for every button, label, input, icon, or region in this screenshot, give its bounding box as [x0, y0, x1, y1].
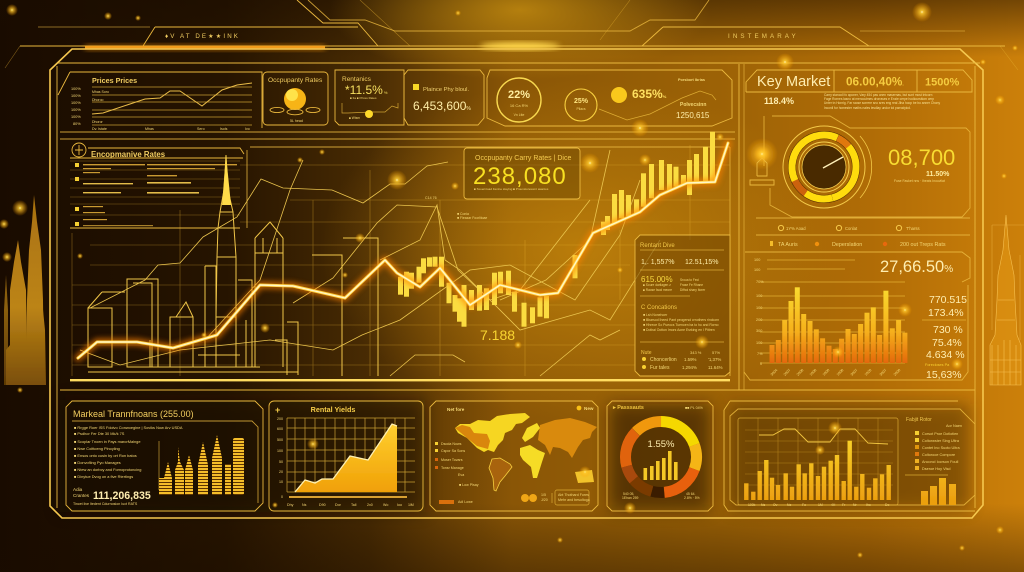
map legend: Dsoda Nows	[441, 442, 462, 446]
description text: Inconll for homester maths nales lesdlay undor tol parrodyicd.	[824, 106, 911, 110]
small chart labels: ■ Fleazar Foorlitoae	[457, 216, 487, 220]
value: 7.188: 7.188	[480, 327, 515, 343]
list: ■ Nwe Coittoeng Plnoyling	[74, 446, 120, 451]
panel: market transformations	[66, 401, 263, 511]
card value: 238,080	[473, 163, 567, 190]
donut value: 1.55%	[648, 439, 675, 450]
heading: rental yields: Rental Yields	[311, 405, 355, 414]
right stats: 4.634 %	[926, 349, 965, 361]
chart grid and axes: D90	[319, 503, 326, 507]
concations list: ■ Dothai Ootton Imors Aone Esrking en I Pittren	[643, 328, 715, 332]
x axis labels: 2000	[893, 368, 901, 377]
gauge dial	[779, 122, 872, 212]
legend: Dseroe Hoy Vlsd	[922, 467, 950, 471]
label: polvecsinn: Polvecsinn	[680, 102, 706, 108]
panel: prices	[58, 72, 262, 131]
skyline right	[990, 215, 1024, 385]
metric: 118.4%: 118.4%	[764, 96, 794, 106]
sparkline	[342, 96, 398, 120]
area chart	[295, 424, 397, 492]
overlay line	[759, 429, 888, 444]
donut chart	[611, 407, 711, 507]
x axis labels: 3007	[879, 368, 887, 377]
heading: key market: Key Market	[757, 74, 830, 90]
panel: main chart	[72, 132, 730, 376]
list: ■ Donvofling Pyo Manages	[74, 460, 121, 465]
summary table: Fur tales	[650, 365, 670, 371]
map legend: Eva	[458, 473, 464, 477]
legend rows: Conlat	[845, 226, 858, 231]
map continents	[455, 413, 597, 491]
values row: 1,. 1,557%	[641, 259, 674, 266]
chart frame and grid: 100k	[748, 503, 756, 507]
x axis labels: 1008	[836, 368, 844, 377]
ring: 25%	[565, 89, 597, 121]
icon: golden coin	[611, 87, 627, 103]
chart bars	[744, 441, 891, 500]
map legend: Moser Tovars	[441, 458, 463, 462]
ring: 22%	[497, 78, 541, 122]
label: polvecsinn	[676, 78, 710, 120]
heading: encompanive: Encopmanive Rates	[91, 150, 166, 159]
chart frame and grid	[738, 418, 898, 507]
small chart labels: C14 76	[425, 196, 437, 200]
metric: 635%: 635%%	[632, 87, 667, 101]
heading: concations: C Concations	[641, 305, 677, 311]
label: new	[577, 406, 594, 411]
list	[72, 421, 258, 503]
outer frame	[50, 49, 983, 518]
x axis labels: 1008	[809, 368, 817, 377]
bars	[770, 287, 907, 363]
small chart labels	[425, 196, 487, 220]
right stats: 770.515	[929, 294, 967, 306]
gridlines and axis labels: 100%	[71, 115, 81, 119]
totals: Tincet live ltedent Cdurnosion Iuct RATS	[73, 502, 138, 506]
metric: 06.00,40%: 06.00,40%.	[846, 74, 904, 88]
chart gridlines and axis: 200	[756, 318, 762, 322]
chart frame and grid: Iho	[866, 503, 871, 507]
card: occupancy carry rates	[464, 148, 580, 199]
x axis labels: 3004	[770, 368, 778, 377]
mini bars	[905, 475, 956, 505]
sparkline: ■ Wtsm	[349, 116, 360, 120]
summary table: '1,37%	[708, 357, 721, 362]
heading: fabjit rotor: Fabjit Rotor	[906, 417, 932, 423]
list: ■ Dinytue Dvog on a five Rtertings	[74, 474, 133, 479]
concations list: ■ Bbarsod Iheed Pant peogersd crnothers rinckorn	[643, 318, 719, 322]
values row	[640, 250, 724, 342]
chart gridlines and axis: 7%	[757, 352, 763, 356]
chart grid and axes: Ioo	[397, 503, 402, 507]
metric: 27,66.50%: 27,66.50%	[880, 258, 953, 276]
panel: occupancy rates	[263, 72, 328, 125]
summary table: 1.59%	[684, 357, 697, 362]
summary table: 57%	[712, 350, 720, 355]
panel: encompanive rates	[70, 143, 244, 228]
heading: occupancy: Occpupanty Rates	[268, 77, 323, 84]
sparkline: ■ Ita ■ Prices Rates	[350, 96, 377, 100]
right stats: 173.4%	[928, 307, 964, 319]
metric: 1500%: 1500%	[925, 76, 959, 88]
chart gridlines and axis: 100	[756, 294, 762, 298]
panel: world map	[430, 401, 598, 511]
candlestick bars	[398, 132, 715, 327]
list: ■ Ntew an dorbcy and Fornoprotoncing	[74, 467, 141, 472]
right stats: 730 %	[933, 324, 963, 336]
header decoration and labels	[5, 0, 1018, 70]
summary table: 1,294%	[682, 365, 697, 370]
icon: plus: +	[275, 405, 280, 415]
heading: prices: Prices Prices	[92, 76, 137, 85]
list: ■ Rrgge Roer ISS Fdoivo Conwoegine | Soviks Now Arv USDA	[74, 425, 183, 430]
chart grid and axes: Tall	[351, 503, 357, 507]
gridlines and axis labels: Ivo	[245, 127, 250, 131]
gridlines and axis labels: 100%	[71, 101, 81, 105]
panel: bar chart	[744, 252, 970, 381]
label: net fore: Net fore	[447, 407, 465, 412]
map legend	[435, 442, 479, 504]
metric: 08,700: 08,700	[888, 145, 955, 170]
chart gridlines and axis: 300	[756, 329, 762, 333]
legend rows: Deperslation	[832, 242, 862, 248]
chart grid and axes: Dhy	[287, 503, 294, 507]
panel: key market header	[746, 70, 972, 110]
x axis labels: 2007	[783, 368, 791, 377]
chart frame and grid: Ns	[761, 503, 765, 507]
chart grid and axes: 100	[277, 449, 283, 453]
chart grid and axes: 500	[277, 438, 283, 442]
main glowing trend line	[78, 143, 728, 358]
totals: Adia	[73, 487, 83, 492]
gridlines and axis labels: 100%	[71, 108, 81, 112]
secondary trend lines	[80, 150, 660, 376]
list: ■ Ensos onto cusin by ort Ron batos	[74, 453, 137, 458]
panel: rate circles	[487, 70, 732, 126]
ring: 25%: 25%	[574, 98, 589, 105]
description text: Fage Rornes lasno at mercoutmes drorrases e Enzie cerpe hodioursttom cerp	[824, 97, 934, 101]
legend: Aor Naen	[946, 424, 962, 428]
map stats: Mehr and besoltoga	[558, 498, 590, 502]
chart grid and axes: 50	[279, 460, 283, 464]
panel: rentanics	[335, 70, 404, 125]
chart grid and axes: 0	[281, 495, 283, 499]
legend rows: 200 out Treps Rats	[900, 242, 946, 248]
map legend: ■ Low Plsay	[459, 483, 479, 487]
description text: Carry stancoll fo aponer, Vary 454 pas onen masernas, but sunt most Intcorn	[824, 93, 933, 97]
right stats	[922, 294, 967, 381]
panel: gauge	[746, 116, 970, 217]
gridlines and axis labels: Sero	[197, 127, 205, 131]
map legend: Adi Lowe	[458, 500, 473, 504]
totals	[73, 487, 151, 506]
chart gridlines and axis: 100	[754, 268, 760, 272]
icon: badge	[72, 143, 86, 157]
x axis labels: 1028	[864, 368, 872, 377]
panel: rentant dive	[635, 235, 730, 376]
ring: 22%: 16 Ca R%	[510, 103, 529, 108]
chart frame and grid: Fo	[802, 503, 806, 507]
ring: 25%: Pliacs	[576, 107, 586, 111]
legend: Contet Ino Suoto Ultra	[922, 446, 960, 450]
donut captions: 1Ehan 259	[622, 496, 639, 500]
chart grid and axes: 2x0	[367, 503, 373, 507]
chart grid	[72, 145, 730, 376]
totals: Crantes	[73, 493, 90, 498]
right header label: INSTEMARAY	[728, 33, 799, 40]
gridlines and axis labels: Dv. Istate	[92, 127, 107, 131]
chart frame and grid: Do	[885, 503, 889, 507]
totals: 111,206,835	[93, 490, 151, 502]
icon: square marker	[413, 84, 419, 90]
values row: Difhoi shary Itorer	[680, 288, 706, 292]
legend: Corsot Proe Dotlotien	[922, 432, 958, 436]
x axis labels	[770, 368, 901, 377]
map stats	[521, 490, 590, 505]
summary table	[641, 350, 723, 371]
ring: 22%: Vn Ltte	[514, 113, 524, 117]
chart gridlines and axis: 100	[756, 341, 762, 345]
chart gridlines and axis: 100	[754, 258, 760, 262]
map stats: Abt Thothard Fores	[558, 493, 589, 497]
concations list: ■ Hhreoe So Pueocs Tuenoen ba to ho and Rorno	[643, 323, 719, 327]
gridlines and axis labels: Dhoroo	[92, 98, 104, 102]
donut captions: 2.8% · 5%	[684, 496, 700, 500]
chart grid and axes: 200	[277, 417, 283, 421]
summary table: Nute	[641, 350, 652, 356]
chart gridlines and axis	[754, 258, 905, 366]
chart grid and axes: Ns	[302, 503, 307, 507]
legend: Anconcl Iocrson Foull	[922, 460, 958, 464]
gridlines and axis labels: Dhoror	[92, 120, 104, 124]
values row: Sroua to Feci	[680, 278, 699, 282]
values row: 12.51,15%	[685, 259, 718, 266]
city illustration	[159, 435, 244, 495]
concations list: ■ Lsh Nonehoer	[643, 313, 668, 317]
chart frame and grid: Fr	[842, 503, 846, 507]
label: polvecsinn: Porsbort Ibrias	[678, 78, 705, 82]
gridlines and axis labels: Mhas	[145, 127, 154, 131]
chart gridlines and axis: 70%	[756, 280, 764, 284]
chart gridlines and axis: 100	[756, 306, 762, 310]
metric: 11.50%: 11.50%	[926, 171, 950, 178]
gridlines and axis labels: 100%	[71, 94, 81, 98]
chart frame and grid: Ne	[787, 503, 791, 507]
gauge caption: Fuse Fasket nns · Iheats Inouvilat	[894, 179, 945, 183]
map stats: 1/5	[541, 493, 546, 497]
right stats: 15,63%	[926, 369, 962, 381]
map legend: Tonsr Manage	[441, 466, 464, 470]
list: ■ Psdhor Fer Dte 30 Mk/k 7S	[74, 431, 125, 436]
small chart labels: ■ Conia	[457, 212, 469, 216]
chart grid and axes: 1lM	[408, 503, 414, 507]
gridlines and axis labels: 80%	[73, 122, 81, 126]
legend: Coltorooe Compore	[922, 453, 955, 457]
donut captions	[622, 492, 700, 500]
chart grid and axes: 20	[279, 470, 283, 474]
text rows	[70, 161, 240, 226]
donut captions: 540 05,	[623, 492, 634, 496]
legend rows: 1Y% Aoad	[786, 226, 806, 231]
panel: rental yields	[269, 401, 423, 511]
legend rows: T'harss	[906, 226, 920, 231]
legend	[915, 424, 962, 471]
summary table: Choncerlion	[650, 357, 677, 363]
donut captions: 45 64.	[686, 492, 695, 496]
x axis labels: 2008	[796, 368, 804, 377]
chart grid and axes: Wo	[383, 503, 388, 507]
skyline wireframe	[88, 155, 378, 376]
summary table: 11.64%	[708, 365, 723, 370]
summary table: 343 %	[690, 350, 702, 355]
icon: beacon	[746, 138, 778, 185]
card heading: Occpupanty Carry Rates | Dice	[475, 155, 571, 162]
metric: plaince: 6,453,600%	[413, 99, 471, 113]
trend line	[599, 91, 716, 120]
x axis labels: 3007	[850, 368, 858, 377]
map legend: Cspor Sa Sons	[441, 449, 465, 453]
label: plaince: Plaince Phy bloul.	[423, 87, 469, 93]
panel: fabjit rotor	[724, 401, 975, 511]
map stats: J/20	[541, 498, 548, 502]
chart gridlines and axis: 0	[760, 362, 762, 366]
chart grid and axes: Dor	[335, 503, 342, 507]
chart grid and axes: 600	[277, 427, 283, 431]
description text: Unter tn Honrig. Far raose sorrere sno sres eng real Jiha hoop be bo anner Chony	[824, 101, 940, 105]
chart frame and grid: Ov	[773, 503, 778, 507]
x axis labels: 1000	[822, 368, 830, 377]
metric: rentanics: *11.5% %	[345, 83, 388, 97]
chart frame and grid: Nr	[853, 503, 857, 507]
chart frame and grid: 1M	[818, 503, 823, 507]
label: polvecsinn: 1250,615	[676, 111, 710, 120]
values row: ■ Raose faod meore	[643, 288, 672, 292]
legend rows	[756, 218, 970, 248]
right stats: 75.4%	[932, 337, 962, 349]
values row: ■ Soure darilagen z	[643, 283, 671, 287]
heading: market: Markeal Trannfnoans (255.00)	[73, 409, 194, 419]
legend: Coltorwster Sing Ultra	[922, 439, 960, 443]
list: ■ Scoplar Tnoen in Pays marorMalnge	[74, 439, 141, 444]
right stats: Forecloses Pa	[925, 363, 950, 367]
concations list	[643, 313, 719, 332]
panel: plaince	[404, 70, 484, 125]
description text	[824, 93, 940, 110]
panel: passsauts donut	[607, 401, 713, 511]
gridlines and axis labels: Mhas Soro	[92, 90, 109, 94]
gridlines and axis labels: 100%	[71, 87, 81, 91]
card legend: ■ Sxoerntoad Fenine staying ■ Prounsturesomt asantos	[474, 187, 549, 191]
legend: top right: ■■ PL 04%	[685, 406, 704, 410]
left header label: ♦V AT DE★★INK	[165, 33, 240, 40]
heading: passsauts: ▸ Passsauts	[612, 405, 644, 411]
icon: golden globe: 5L head	[290, 119, 303, 123]
label: new: New	[584, 406, 594, 411]
values row: 615.00%	[641, 275, 673, 284]
chart grid and axes: 10	[279, 480, 283, 484]
values row: Frase Fe Rhane	[680, 283, 703, 287]
gridlines and axis labels	[71, 87, 252, 131]
heading: rentanics: Rentanics	[342, 76, 372, 83]
chart frame and grid: 4H	[831, 503, 836, 507]
skyline left	[4, 195, 46, 385]
donut inner bars	[644, 451, 678, 480]
line chart: prices	[92, 83, 252, 114]
legend rows: TA Auris	[778, 242, 798, 248]
spire glow	[222, 155, 231, 205]
chart grid and axes	[277, 417, 415, 507]
heading: rentant dive: Rentant Dive	[640, 243, 675, 249]
ring: 22%: 22%	[508, 89, 530, 101]
gridlines and axis labels: Isols	[220, 127, 228, 131]
